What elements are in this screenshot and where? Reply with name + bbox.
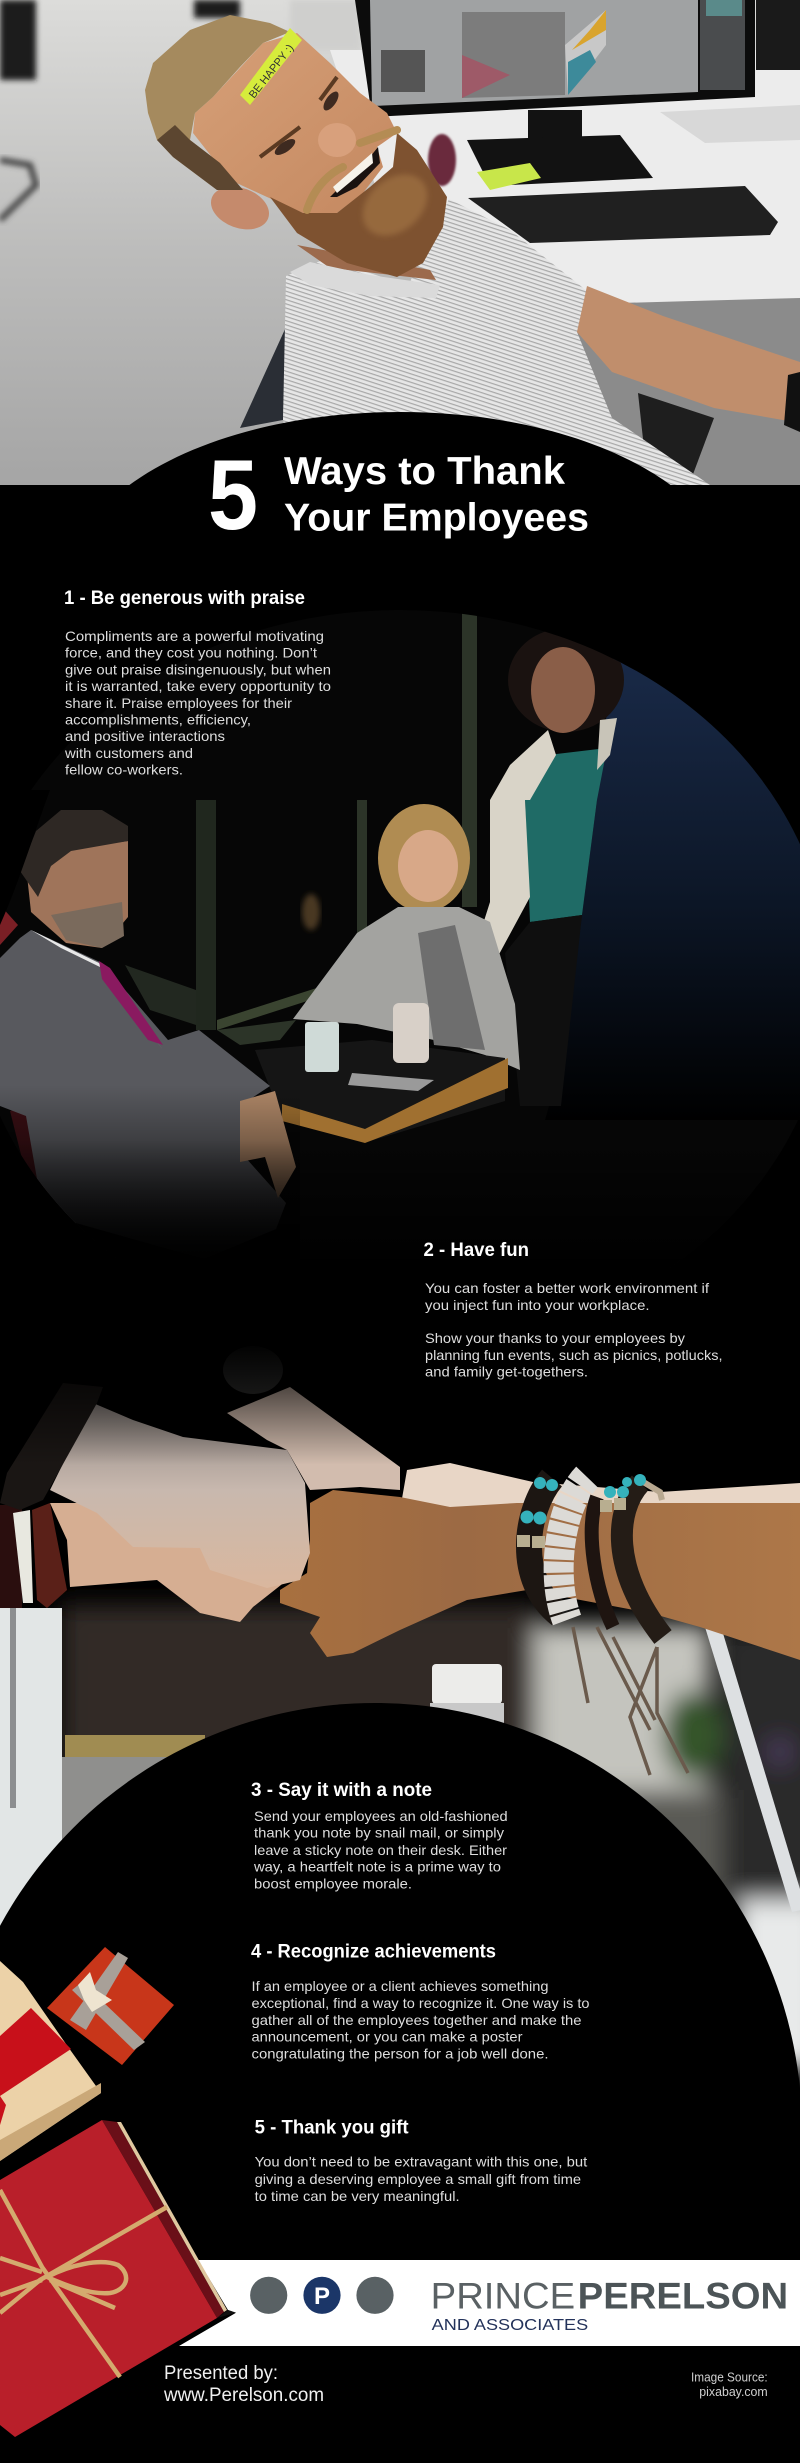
bracelet tassels bbox=[573, 1627, 688, 1775]
collage on screen bbox=[462, 12, 565, 98]
heading 2: 2 - Have fun bbox=[424, 1240, 529, 1261]
meeting photo bbox=[0, 614, 800, 1224]
body 5: You don’t need to be extravagant with this one, but bbox=[255, 2154, 587, 2170]
dark hair under part bbox=[157, 125, 243, 190]
logo bbox=[250, 2275, 788, 2334]
body 4: exceptional, find a way to recognize it. One way is to bbox=[252, 1995, 590, 2011]
hair bbox=[145, 15, 290, 190]
nose bbox=[318, 123, 356, 157]
body 4: gather all of the employees together and make the bbox=[252, 2012, 582, 2028]
body 1: with customers and bbox=[64, 745, 193, 761]
white cuff bbox=[13, 1510, 33, 1603]
body 4: congratulating the person for a job well done. bbox=[252, 2046, 548, 2062]
tagline: AND ASSOCIATES bbox=[432, 2317, 588, 2334]
ear bbox=[211, 188, 269, 230]
phone bbox=[348, 1073, 434, 1091]
brows and eyes bbox=[260, 77, 341, 158]
sticky note on forehead: BE HAPPY :) bbox=[247, 42, 296, 101]
image source bbox=[691, 2370, 768, 2399]
jar bbox=[62, 1735, 205, 1887]
heading 3: 3 - Say it with a note bbox=[251, 1780, 432, 1801]
top fade into black bbox=[0, 1340, 405, 1465]
section 4 bbox=[251, 1942, 590, 2062]
teeth bbox=[333, 153, 373, 193]
suit shadow fade bbox=[0, 1085, 300, 1270]
presented by: www.Perelson.com bbox=[163, 2385, 324, 2406]
chair fragments bbox=[0, 0, 240, 80]
body 1: share it. Praise employees for their bbox=[65, 695, 292, 711]
presented by bbox=[163, 2363, 324, 2406]
man in suit bbox=[0, 810, 296, 1259]
back wall bbox=[292, 1, 358, 40]
face bbox=[193, 33, 397, 213]
logo dots: P bbox=[314, 2283, 330, 2310]
standing woman bbox=[477, 628, 624, 1106]
body 3 bbox=[253, 1808, 508, 1892]
left corner mask of meeting photo bbox=[0, 790, 50, 925]
black circle panel bbox=[0, 1703, 800, 2463]
company name: PRINCE bbox=[431, 2275, 575, 2316]
body 1: force, and they cost you nothing. Don’t bbox=[65, 645, 317, 661]
body 5: to time can be very meaningful. bbox=[255, 2188, 460, 2204]
body 3: leave a sticky note on their desk. Either bbox=[254, 1842, 507, 1858]
turquoise beads bbox=[520, 1474, 646, 1524]
shirt bbox=[283, 199, 710, 485]
black lower background bbox=[0, 2130, 800, 2463]
body 2 bbox=[425, 1280, 722, 1380]
carpet floor bbox=[0, 0, 800, 485]
bottom fade bbox=[0, 1140, 800, 1270]
body 2: and family get-togethers. bbox=[425, 1364, 588, 1380]
seated woman bbox=[293, 804, 520, 1070]
body 1 bbox=[64, 628, 331, 778]
brown arm bbox=[280, 1490, 800, 1660]
twine bow bbox=[0, 2190, 167, 2377]
beard highlight bbox=[362, 174, 428, 236]
navy figure on right bbox=[568, 658, 800, 1040]
mustache bbox=[307, 130, 397, 210]
body 3: boost employee morale. bbox=[254, 1876, 412, 1892]
bracelets bbox=[529, 1477, 688, 1775]
title bbox=[208, 439, 589, 550]
gift boxes bbox=[0, 1947, 236, 2437]
mouth bbox=[330, 147, 380, 197]
body 2: You can foster a better work environment if bbox=[425, 1280, 709, 1296]
title: Ways to Thank bbox=[284, 450, 565, 493]
bottle bbox=[430, 1664, 504, 1723]
body 1: Compliments are a powerful motivating bbox=[65, 628, 324, 644]
monitor stand bbox=[467, 110, 653, 186]
fist bump photo bbox=[0, 1340, 800, 2145]
right chair arm bbox=[638, 393, 714, 474]
coffee cups bbox=[305, 1003, 429, 1072]
cream gift bbox=[0, 1961, 101, 2161]
body 2: planning fun events, such as picnics, potlucks, bbox=[425, 1347, 722, 1363]
heading 5: 5 - Thank you gift bbox=[255, 2117, 409, 2138]
blurred chair arm bbox=[0, 160, 36, 220]
section 3 bbox=[251, 1780, 508, 1892]
left white strip bbox=[0, 1608, 62, 1948]
chair back bbox=[240, 327, 286, 428]
white logo band bbox=[179, 2260, 800, 2346]
hero photo: smiling man at desk bbox=[0, 0, 800, 485]
body 1: accomplishments, efficiency, bbox=[65, 712, 251, 728]
body 1: it is warranted, take every opportunity to bbox=[65, 678, 331, 694]
sticky note on forehead bbox=[240, 28, 302, 105]
arm bbox=[577, 286, 800, 423]
black title dome bbox=[128, 412, 672, 486]
title: 5 bbox=[208, 439, 258, 550]
presented by: Presented by: bbox=[164, 2363, 278, 2384]
body 3: way, a heartfelt note is a prime way to bbox=[253, 1858, 501, 1874]
beige beads bbox=[517, 1498, 626, 1548]
body 4 bbox=[252, 1978, 590, 2062]
left fist bbox=[50, 1403, 310, 1588]
section 2 bbox=[424, 1240, 722, 1380]
body 4: If an employee or a client achieves something bbox=[252, 1978, 548, 1994]
body 1: fellow co-workers. bbox=[65, 762, 183, 778]
body 2: Show your thanks to your employees by bbox=[425, 1330, 685, 1346]
logo dots bbox=[250, 2277, 394, 2314]
neck bbox=[297, 245, 436, 280]
body 5 bbox=[255, 2154, 587, 2204]
body 4: announcement, or you can make a poster bbox=[252, 2028, 523, 2044]
body 1: and positive interactions bbox=[65, 728, 225, 744]
body 1: give out praise disingenuously, but when bbox=[65, 662, 331, 678]
section 1 bbox=[64, 588, 331, 778]
heading 4: 4 - Recognize achievements bbox=[251, 1942, 496, 1962]
floor under desk bbox=[560, 295, 800, 485]
lower pale fingers bbox=[50, 1503, 300, 1622]
image source: pixabay.com bbox=[699, 2384, 768, 2399]
table edge bbox=[282, 1058, 508, 1143]
section 5 bbox=[255, 2117, 587, 2204]
back pale forearm right bbox=[400, 1463, 800, 1510]
collar bbox=[290, 262, 440, 298]
leather watch band bbox=[0, 1383, 103, 1510]
beard bbox=[270, 133, 447, 277]
white desk bbox=[330, 50, 800, 303]
thin white diagonal bbox=[705, 1627, 800, 1912]
small orange gift bbox=[47, 1947, 174, 2065]
green sticky note pad bbox=[477, 163, 541, 190]
window frames bbox=[125, 612, 477, 1045]
body 3: thank you note by snail mail, or simply bbox=[254, 1825, 504, 1841]
dark sleeve bbox=[0, 1505, 22, 1608]
large red gift bbox=[0, 2120, 236, 2437]
title: Your Employees bbox=[284, 496, 589, 540]
watch bbox=[784, 372, 800, 432]
body 3: Send your employees an old-fashioned bbox=[254, 1808, 508, 1824]
gold watch bbox=[32, 1503, 67, 1608]
image source: Image Source: bbox=[691, 2370, 768, 2385]
faded watch shape bbox=[223, 1346, 283, 1394]
keyboard bbox=[468, 186, 778, 243]
table bbox=[255, 1040, 505, 1142]
heading 1: 1 - Be generous with praise bbox=[64, 588, 305, 609]
logo: PERELSON bbox=[578, 2275, 788, 2316]
desk papers bbox=[660, 105, 800, 143]
back pale arm bbox=[227, 1387, 400, 1490]
mug bbox=[428, 134, 456, 186]
blurred background bbox=[60, 1605, 800, 2145]
monitor bbox=[355, 0, 800, 117]
body 5: giving a deserving employee a small gift from time bbox=[255, 2171, 581, 2187]
distant lights bbox=[302, 894, 320, 930]
body 2: you inject fun into your workplace. bbox=[425, 1297, 650, 1313]
